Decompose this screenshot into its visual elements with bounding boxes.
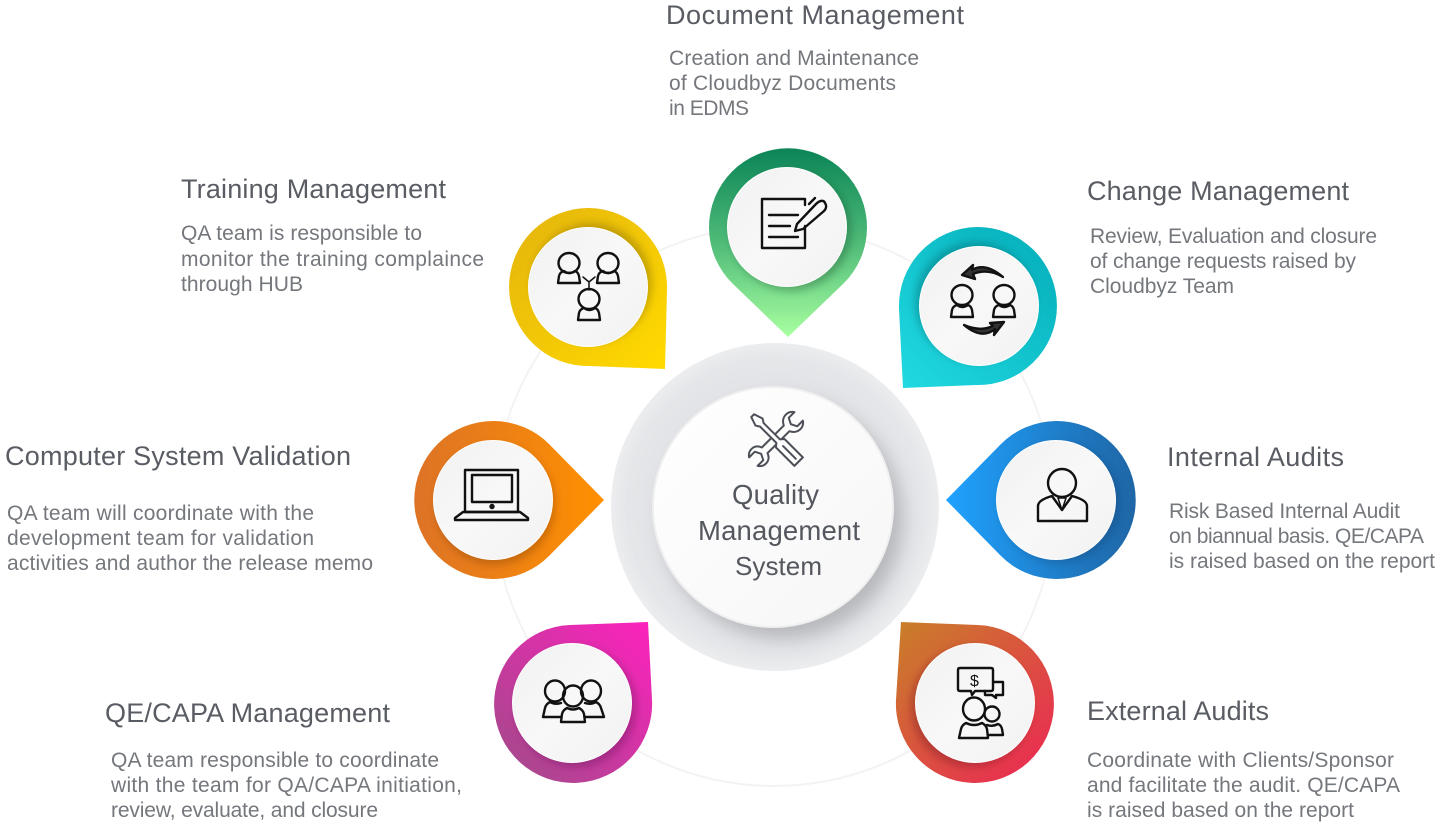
icon: person with tie xyxy=(1038,469,1087,521)
text: document management: in EDMS xyxy=(669,97,749,120)
text: training management: QA team is responsible to xyxy=(181,222,422,245)
text: internal audits: Risk Based Internal Audit xyxy=(1169,500,1400,523)
text: computer system validation: activities and author the release memo xyxy=(7,552,373,575)
text: QE/CAPA management: review, evaluate, and closure xyxy=(111,799,378,822)
text: QE/CAPA management: QA team responsible to coordinate xyxy=(111,749,439,772)
panel: computer system validation pin xyxy=(414,421,604,579)
icon: crossed tools xyxy=(746,409,806,469)
text: external audits: External Audits xyxy=(1087,696,1269,726)
inner disc xyxy=(920,246,1038,366)
text: QE/CAPA management: with the team for QA/CAPA initiation, xyxy=(110,774,462,797)
text: document management: of Cloudbyz Documents xyxy=(669,72,896,95)
pin body xyxy=(509,208,667,369)
icon: laptop xyxy=(455,470,528,520)
inner disc xyxy=(512,644,632,762)
hub title: Quality xyxy=(732,479,819,510)
text: QE/CAPA management xyxy=(105,698,462,822)
inner disc xyxy=(916,644,1034,762)
text: change management: Change Management xyxy=(1087,176,1349,206)
icon: three connected people xyxy=(558,253,619,320)
text: external audits xyxy=(1087,696,1400,822)
hub title: Management xyxy=(698,515,860,546)
text: computer system validation: development team for validation xyxy=(7,527,314,550)
text: change management: of change requests raised by xyxy=(1090,250,1356,273)
icon: people exchanging arrows xyxy=(951,265,1015,335)
text: computer system validation: QA team will coordinate with the xyxy=(7,502,314,525)
hub shadow xyxy=(663,399,903,639)
text: internal audits: is raised based on the report xyxy=(1169,550,1435,573)
panel: external audits pin xyxy=(896,622,1054,783)
text: internal audits: on biannual basis. QE/CAPA xyxy=(1169,525,1424,548)
pin shadow xyxy=(911,647,1031,767)
pin shadow xyxy=(532,223,652,343)
panel: change management pin xyxy=(899,227,1057,388)
text: training management xyxy=(181,174,484,296)
text: change management xyxy=(1087,176,1377,298)
text: document management: Creation and Maintenance xyxy=(669,47,919,70)
panel: document management pin xyxy=(709,148,867,337)
hub title: System xyxy=(735,551,822,581)
hub outer disc xyxy=(611,343,939,671)
inner disc xyxy=(728,168,846,286)
text: training management: through HUB xyxy=(181,273,303,296)
pin shadow xyxy=(731,171,851,291)
pin body xyxy=(414,421,604,579)
text: change management: Cloudbyz Team xyxy=(1090,275,1234,298)
inner disc xyxy=(528,228,648,346)
panel: internal audits pin xyxy=(946,421,1136,579)
pin body xyxy=(899,227,1057,388)
icon: people with speech bubbles: $ xyxy=(970,673,979,690)
text: internal audits: Internal Audits xyxy=(1167,442,1344,472)
pin body xyxy=(896,622,1054,783)
text: internal audits xyxy=(1167,442,1435,573)
text: training management: Training Management xyxy=(181,174,446,204)
text: computer system validation: Computer System Validation xyxy=(5,441,351,471)
panel: central hub xyxy=(611,343,939,671)
text: training management: monitor the training complaince xyxy=(181,248,484,271)
icon: people with speech bubbles xyxy=(958,668,1003,738)
orbit ring xyxy=(494,226,1054,786)
inner disc xyxy=(996,440,1116,560)
text: external audits: and facilitate the audit. QE/CAPA xyxy=(1087,774,1400,797)
inner disc xyxy=(434,440,552,560)
text: change management: Review, Evaluation and closure xyxy=(1090,225,1377,248)
hub inner disc xyxy=(653,387,893,627)
pin shadow xyxy=(1000,443,1120,563)
text: document management: Document Management xyxy=(666,0,964,30)
text: external audits: is raised based on the report xyxy=(1087,799,1354,822)
text: external audits: Coordinate with Clients/Sponsor xyxy=(1087,749,1394,772)
pin body xyxy=(709,148,867,337)
icon: group of people xyxy=(543,680,604,722)
hub title xyxy=(698,479,860,581)
icon: document and pen xyxy=(762,198,826,248)
panel: QE/CAPA management pin xyxy=(494,622,652,783)
pin shadow xyxy=(435,445,555,565)
pin shadow xyxy=(915,242,1035,362)
panel: training management pin xyxy=(509,208,667,369)
pin body xyxy=(494,622,652,783)
pin shadow xyxy=(516,647,636,767)
pin body xyxy=(946,421,1136,579)
text: computer system validation xyxy=(5,441,373,575)
text: document management xyxy=(666,0,964,120)
text: QE/CAPA management: QE/CAPA Management xyxy=(105,698,390,728)
